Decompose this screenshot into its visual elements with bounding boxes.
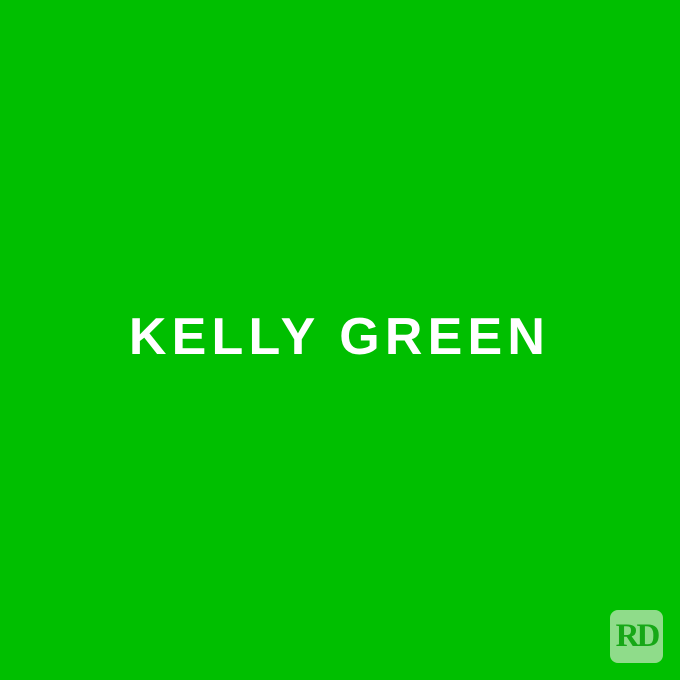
title: KELLY GREEN <box>129 308 550 366</box>
icon: RD logo <box>610 610 663 663</box>
icon: RD logo: RD <box>616 618 657 654</box>
